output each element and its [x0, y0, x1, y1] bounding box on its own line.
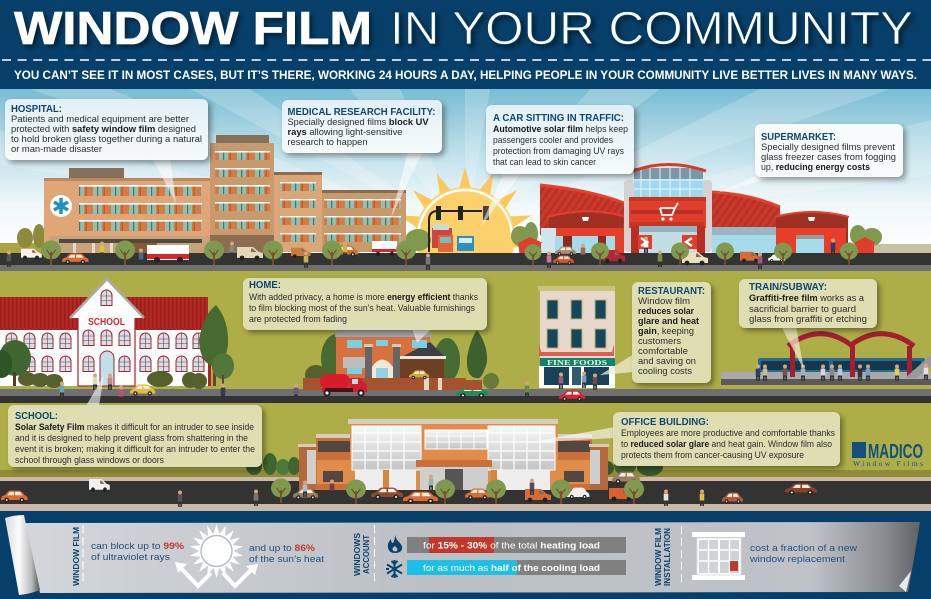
storefront [539, 366, 615, 388]
escalator [905, 355, 931, 378]
entrance [50, 236, 210, 256]
icon: shopping cart [660, 203, 678, 221]
train [758, 358, 925, 373]
callout: hospital: to hold broken glass together during a natural [11, 133, 202, 144]
callout: restaurant: RESTAURANT: [638, 286, 705, 297]
ultraviolet text: can block up to 99% [91, 541, 185, 552]
callout: supermarket [717, 124, 903, 193]
ambulance [147, 245, 189, 263]
sun rays [0, 89, 931, 237]
store entrance [631, 226, 705, 254]
sun [395, 167, 535, 287]
left curl [5, 515, 40, 595]
road one [0, 253, 931, 271]
heat text: of the sun’s heat [249, 554, 324, 565]
callout: car in traffic: passengers cooler and provides [493, 134, 613, 145]
callout: school: and it is designed to help prevent glass from shattering in the [15, 432, 248, 443]
far wing [322, 190, 406, 252]
restaurant people [559, 372, 597, 390]
sign text: FINE FOODS [547, 358, 607, 367]
callout: school: event it is broken; making it difficult for an intruder to enter the [15, 443, 255, 454]
row two vehicles [130, 374, 585, 401]
callout: school: Solar Safety Film makes it difficult for an intruder to see inside [15, 421, 254, 432]
callout: office building: OFFICE BUILDING: [621, 417, 709, 428]
callout: office building: protects them from cancer-causing UV exposure [621, 449, 804, 460]
title: WINDOW FILM [14, 2, 372, 54]
second ambulance [372, 241, 397, 256]
callout: train subway: sacrificial barrier to guard [749, 303, 856, 314]
callout: train subway: glass from graffiti or etching [749, 313, 867, 324]
icon: window [692, 532, 745, 580]
icon: sun [189, 524, 244, 578]
row one people [7, 236, 835, 270]
callout: hospital: protected with safety window film designed [11, 123, 196, 134]
heating bar [407, 537, 626, 553]
supermarket [518, 164, 876, 257]
center [78, 310, 135, 386]
subtitle: YOU CAN’T SEE IT IN MOST CASES, BUT IT’S THERE, WORKING 24 HOURS A DAY, HELPING PEOPLE IN YOUR COMMUNITY LIVE BETTER LIVES IN MANY WAYS. [14, 70, 917, 82]
scroll body [24, 522, 920, 593]
vertical label: INSTALLATION [662, 528, 672, 586]
store sign [540, 358, 615, 366]
tree by restaurant [465, 330, 499, 390]
row three trees [271, 478, 644, 504]
callout: car in traffic: that can lead to skin cancer [493, 156, 596, 167]
bottom banner [5, 515, 920, 595]
callout: hospital: HOSPITAL: [11, 104, 62, 115]
small cart icon [582, 217, 589, 221]
callout: train subway: Graffiti-free film works as a [749, 292, 865, 303]
vertical label: WINDOW FILM [71, 527, 81, 586]
title [14, 2, 913, 54]
left wing [299, 445, 317, 490]
callout: medical research facility: research to happen [288, 136, 368, 147]
callout: hospital: Patients and medical equipment are better [11, 113, 189, 124]
windows account block [352, 525, 626, 585]
replacement text: window replacement [749, 554, 845, 565]
callout: hospital: or man-made disaster [11, 143, 102, 154]
callout: school: school through glass windows or doors [15, 454, 164, 465]
row two people [60, 374, 529, 402]
heat text: and up to 86% [249, 543, 315, 554]
callout: car in traffic: A CAR SITTING IN TRAFFIC: [493, 113, 624, 124]
central tower [624, 180, 634, 252]
icon: flame [388, 535, 402, 553]
fine foods restaurant [538, 286, 615, 388]
main block [44, 178, 211, 246]
roof [0, 297, 208, 330]
callout: office building: to reduced solar glare and heat gain. Window film also [621, 438, 832, 449]
icon: snowflake [386, 560, 402, 578]
callout: medical research facility: rays allowing light-sensitive [288, 126, 402, 137]
door [100, 351, 114, 386]
callout: restaurant: and saving on [638, 355, 696, 366]
left wing roof [540, 185, 624, 235]
hospital [44, 135, 406, 256]
horizon [0, 222, 931, 254]
wings [0, 330, 211, 386]
home [303, 317, 466, 390]
bushes [246, 453, 663, 476]
madico logo [852, 441, 923, 468]
callout: home: are protected from fading [249, 313, 347, 324]
callout: train subway: TRAIN/SUBWAY: [749, 282, 827, 293]
vertical label: WINDOW FILM [653, 528, 663, 586]
centre block [350, 424, 558, 490]
callout: supermarket: SUPERMARKET: [761, 132, 836, 143]
callout: medical research facility [282, 100, 442, 218]
sky [0, 89, 931, 254]
callout: supermarket: glass freezer cases from fogging [761, 151, 896, 162]
train station [721, 334, 931, 385]
right block [776, 211, 848, 253]
row three cars [1, 472, 817, 504]
awning trim [539, 344, 614, 356]
school label: SCHOOL [88, 317, 125, 328]
callout: office building: Employees are more productive and comfortable thanks [621, 427, 835, 438]
madico logo: Window Films [853, 459, 923, 468]
replacement text [749, 543, 857, 565]
right wing roof [712, 192, 780, 235]
callout: home [243, 278, 487, 343]
arches [788, 334, 914, 377]
callout: home: With added privacy, a home is more energy efficient thanks [249, 291, 478, 302]
title: IN YOUR COMMUNITY [390, 2, 913, 54]
row three people [178, 474, 704, 507]
callout: school: SCHOOL: [15, 411, 58, 422]
platform [721, 372, 931, 379]
row one trees [41, 240, 858, 265]
callout: restaurant: reduces solar [638, 305, 694, 316]
callout: hospital [5, 99, 208, 203]
facade [540, 290, 615, 360]
upper windows [547, 300, 606, 348]
callout: office building [525, 412, 840, 466]
callout: car in traffic: protection from damaging UV rays [493, 145, 624, 156]
glazing grids [352, 426, 421, 470]
callout: train subway [739, 279, 877, 370]
callout: restaurant [600, 282, 711, 383]
traffic light and cars in traffic [429, 206, 489, 252]
vertical label [352, 533, 371, 576]
tower [210, 143, 274, 253]
callout: restaurant: Window film [638, 295, 690, 306]
callout: restaurant: gain, keeping [638, 325, 694, 336]
icon: medical star [50, 195, 72, 217]
page corner fold [899, 571, 911, 592]
callout: restaurant: glare and heat [638, 315, 699, 326]
vertical label: ACCOUNT [361, 534, 371, 574]
callout: restaurant: comfortable [638, 345, 688, 356]
callout: car in traffic: Automotive solar film helps keep [493, 123, 628, 134]
red tanker truck [320, 374, 367, 397]
window film block [71, 524, 324, 586]
callout: home: HOME: [249, 280, 281, 291]
cooling bar: for as much as half of the cooling load [423, 563, 600, 574]
cooling bar [407, 560, 626, 575]
callout: car in traffic [480, 105, 634, 228]
right wing [557, 435, 592, 490]
callout: school [8, 375, 262, 467]
platform people [756, 364, 928, 381]
windows [6, 330, 204, 372]
ultraviolet text: of ultraviolet rays [91, 552, 170, 563]
callout: medical research facility: MEDICAL RESEARCH FACILITY: [288, 107, 436, 118]
heating bar: for 15% - 30% of the total heating load [423, 540, 600, 552]
callout: supermarket: up, reducing energy costs [761, 161, 870, 172]
ground rows [0, 271, 931, 511]
callout: restaurant: cooling costs [638, 365, 692, 376]
callout: home: to film blocking most of the sun’s heat. Valuable furnishings [249, 302, 475, 313]
row one vehicles [21, 241, 785, 265]
vertical label [653, 528, 672, 586]
school [0, 279, 211, 386]
callout: medical research facility: Specially designed films block UV [288, 116, 429, 127]
window film installation block [653, 526, 857, 586]
callout: supermarket: Specially designed films prevent [761, 141, 895, 152]
icon: reflecting arrows [175, 562, 258, 586]
kiosks [518, 237, 543, 257]
vertical label: WINDOWS [352, 533, 362, 576]
heat text [249, 543, 324, 565]
wing [274, 172, 322, 252]
ultraviolet text [91, 541, 185, 563]
header [2, 2, 931, 82]
school trees and bushes [0, 305, 234, 389]
callout: restaurant: customers [638, 335, 681, 346]
office building [246, 419, 663, 490]
replacement text: cost a fraction of a new [750, 543, 857, 554]
